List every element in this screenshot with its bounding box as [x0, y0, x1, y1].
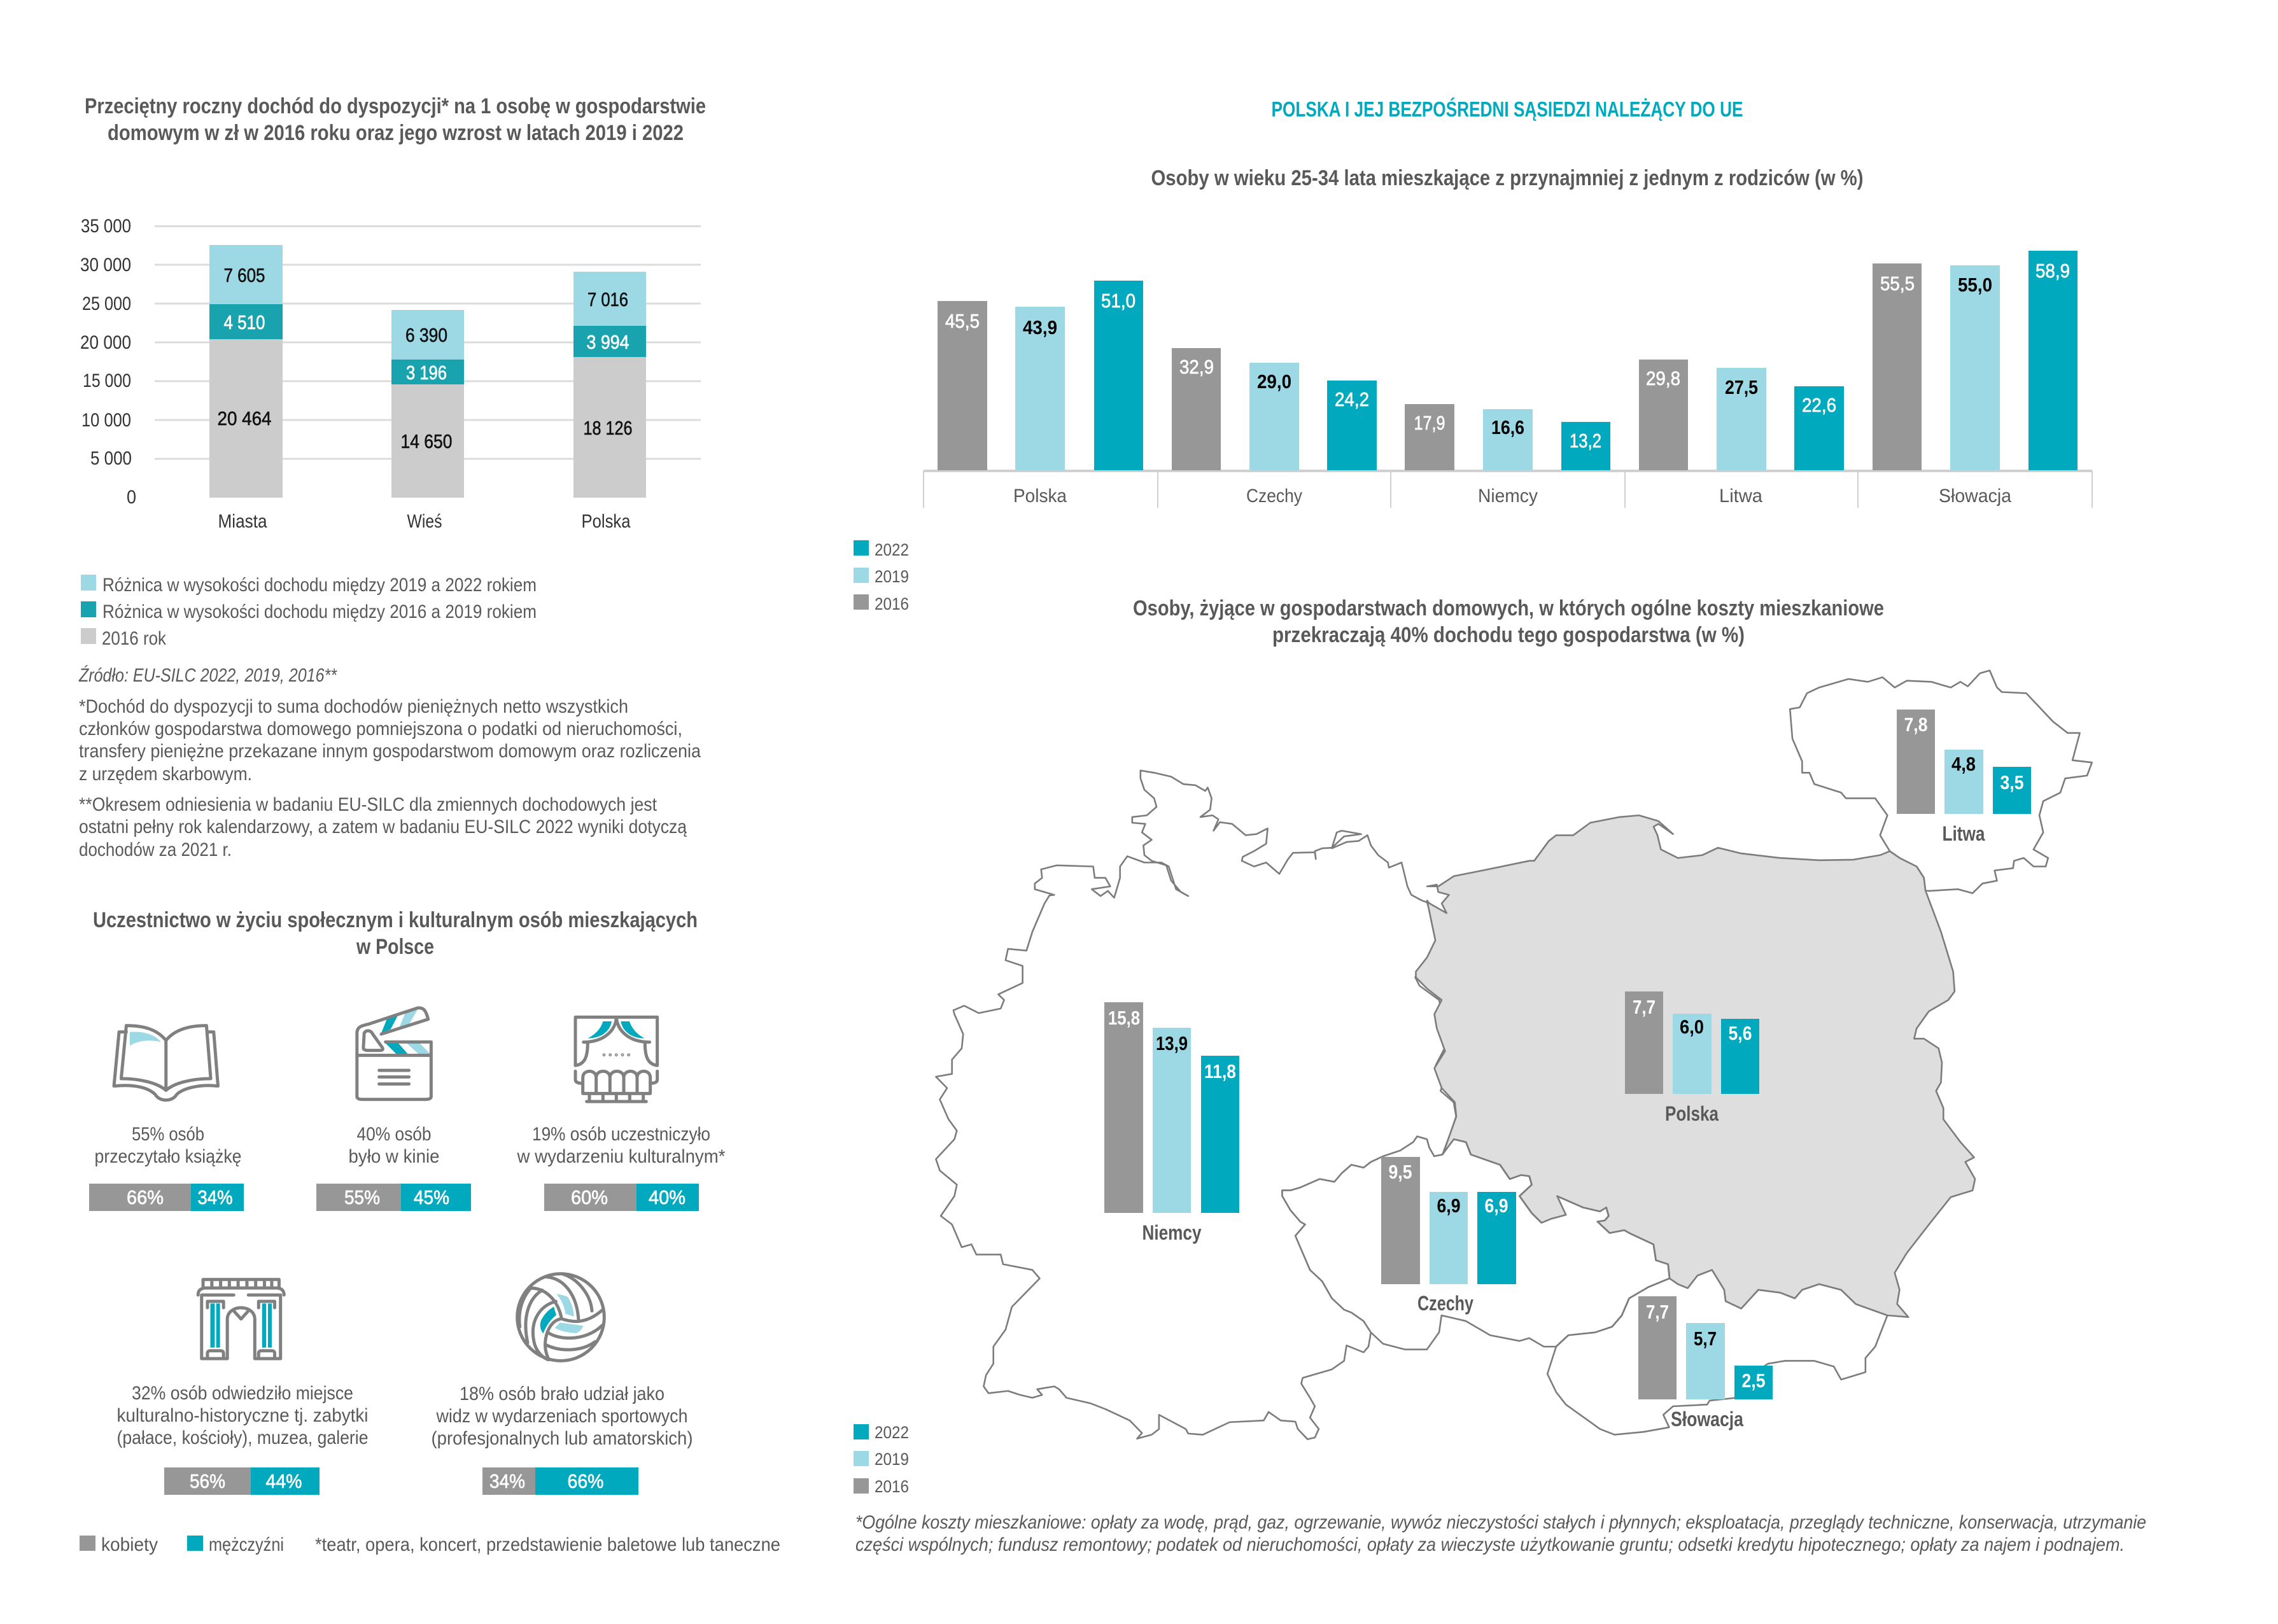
- gender bar: heritage sites: [164, 1467, 320, 1495]
- map: Slovakia: [1547, 1270, 1887, 1435]
- text block: source and notes: ostatni pełny rok kalendarzowy, a zatem w badaniu EU-SILC 2022 wyniki dotyczą: [79, 816, 687, 837]
- map bars: Niemcy: 11,8: [1204, 1060, 1236, 1082]
- legend: gender and footnote: kobiety: [101, 1534, 158, 1555]
- bar group: Niemcy: 17,9: [1414, 412, 1445, 434]
- stacked bar: Wieś: 3 196: [406, 361, 447, 384]
- legend: years: [854, 540, 909, 613]
- stacked bar: Polska: 7 016: [587, 288, 628, 311]
- gender bar: sport events: [482, 1467, 638, 1495]
- legend: gender and footnote: *teatr, opera, koncert, przedstawienie baletowe lub taneczne: [315, 1534, 780, 1555]
- panel: people living with parents chart: [854, 166, 2092, 613]
- map bars: Niemcy: [1104, 1002, 1239, 1244]
- bar group: Litwa: 22,6: [1802, 394, 1836, 416]
- map bars: Niemcy: 15,8: [1108, 1007, 1140, 1029]
- legend: years: 2016: [875, 594, 909, 613]
- panel: social and cultural participation: [80, 908, 780, 1555]
- panel: housing costs map: [854, 596, 2146, 1555]
- bar group: Polska: 45,5: [945, 310, 980, 332]
- text block: source and notes: członków gospodarstwa domowego pomniejszona o podatki od nieruchomości,: [79, 718, 682, 739]
- stacked bar: Miasta: Miasta: [218, 511, 267, 532]
- map bars: Niemcy: 13,9: [1156, 1032, 1188, 1054]
- map: country outlines: [936, 671, 2092, 1439]
- heading: participation title: [93, 908, 698, 959]
- item: heritage sites: [117, 1280, 368, 1495]
- caption: cinema: 40% osób: [356, 1124, 432, 1145]
- legend: income chart: Różnica w wysokości dochodu między 2019 a 2022 rokiem: [102, 575, 537, 596]
- caption: cultural event: 19% osób uczestniczyło: [532, 1124, 710, 1145]
- stacked bar: Polska: 3 994: [587, 331, 629, 353]
- map bars: Słowacja: 5,7: [1694, 1327, 1717, 1350]
- bar group: Czechy: 32,9: [1179, 356, 1214, 378]
- map: Poland: [1416, 815, 1975, 1317]
- map bars: Słowacja: [1638, 1296, 1773, 1431]
- gender bar: book: 34%: [197, 1186, 233, 1208]
- item: sport events: (profesjonalnych lub amatorskich): [432, 1428, 693, 1449]
- map bars: Czechy: [1381, 1157, 1516, 1315]
- footnote: housing costs definition: części wspólnych; fundusz remontowy; podatek od nieruchomości, opłaty za wieczyste użytkowanie gruntu; odsetki kredytu hipotecznego; opłaty za najem i podnajem.: [855, 1534, 2125, 1555]
- map bars: Litwa: 7,8: [1904, 713, 1927, 736]
- item: cultural event: [517, 1017, 726, 1211]
- map bars: Niemcy: Niemcy: [1142, 1221, 1202, 1244]
- caption: heritage sites: 32% osób odwiedziło miejsce: [132, 1383, 353, 1404]
- bar group: Niemcy: 16,6: [1491, 416, 1524, 438]
- stacked bar: Miasta: 7 605: [224, 264, 265, 286]
- y axis labels: 20 000: [80, 332, 131, 353]
- y axis labels: 25 000: [82, 293, 131, 314]
- gender bar: cinema: [316, 1184, 471, 1211]
- icon: triumphal arch: [198, 1280, 284, 1359]
- bar group: Polska: 51,0: [1101, 290, 1135, 312]
- legend: gender and footnote: [80, 1534, 780, 1555]
- stacked bar: Polska: 18 126: [583, 417, 633, 439]
- legend: gender and footnote: mężczyźni: [209, 1534, 284, 1555]
- panel: income chart: [78, 94, 706, 860]
- bar group: Czechy: 29,0: [1257, 370, 1291, 393]
- heading: map title: Osoby, żyjące w gospodarstwach domowych, w których ogólne koszty mieszkaniowe: [1133, 596, 1884, 620]
- map bars: Litwa: [1897, 710, 2031, 845]
- axis frame: [924, 471, 2092, 508]
- map bars: Litwa: 3,5: [2000, 771, 2024, 794]
- bar group: Czechy: [1172, 348, 1377, 507]
- bar group: Czechy: Czechy: [1246, 486, 1302, 507]
- item: sport events: widz w wydarzeniach sportowych: [436, 1406, 687, 1427]
- gender bar: cultural event: 60%: [571, 1186, 608, 1208]
- bar group: Polska: 43,9: [1023, 316, 1057, 339]
- heading: map title: przekraczają 40% dochodu tego gospodarstwa (w %): [1272, 623, 1745, 647]
- map: Czech Republic: [1283, 1137, 1670, 1350]
- y axis labels: [80, 216, 136, 508]
- bar group: Litwa: Litwa: [1719, 486, 1762, 507]
- legend: income chart: Różnica w wysokości dochodu między 2016 a 2019 rokiem: [102, 601, 537, 622]
- gender bar: heritage sites: 44%: [266, 1470, 302, 1492]
- item: sport events: [432, 1274, 693, 1495]
- legend: map years: [854, 1423, 909, 1496]
- text block: source and notes: dochodów za 2021 r.: [79, 839, 232, 860]
- map bars: Czechy: 9,5: [1389, 1161, 1412, 1183]
- map bars: Polska: 5,6: [1729, 1022, 1752, 1044]
- text block: source and notes: **Okresem odniesienia w badaniu EU-SILC dla zmiennych dochodowych jest: [79, 794, 657, 815]
- map bars: Czechy: 6,9: [1437, 1194, 1460, 1217]
- text block: source and notes: *Dochód do dyspozycji to suma dochodów pieniężnych netto wszystkich: [79, 696, 628, 717]
- map bars: Czechy: 6,9: [1484, 1194, 1508, 1217]
- heading: map title: [1133, 596, 1884, 647]
- icon: volleyball: [517, 1274, 604, 1361]
- map bars: Polska: 7,7: [1633, 996, 1656, 1018]
- bar group: Czechy: 24,2: [1335, 388, 1369, 410]
- gender bar: cinema: 55%: [344, 1186, 380, 1208]
- gender bar: heritage sites: 56%: [190, 1470, 225, 1492]
- map bars: Polska: 6,0: [1680, 1016, 1704, 1038]
- text block: source and notes: Źródło: EU-SILC 2022, 2019, 2016**: [78, 665, 337, 686]
- map bars: Czechy: Czechy: [1417, 1292, 1473, 1315]
- bar group: Słowacja: 58,9: [2035, 260, 2070, 282]
- item: book: [89, 1026, 244, 1211]
- y axis labels: 30 000: [80, 255, 131, 276]
- stacked bar chart: income: [80, 216, 701, 532]
- map bars: Słowacja: 2,5: [1741, 1369, 1766, 1392]
- bar group: Słowacja: 55,0: [1958, 274, 1992, 296]
- bar group: Słowacja: Słowacja: [1939, 486, 2011, 507]
- stacked bar: Miasta: 20 464: [218, 407, 271, 430]
- bar group: Polska: Polska: [1013, 486, 1067, 507]
- heading: income chart title: [85, 94, 706, 145]
- map bars: Polska: Polska: [1665, 1102, 1719, 1125]
- legend: map years: 2019: [875, 1450, 909, 1469]
- bar group: Słowacja: [1873, 251, 2078, 507]
- heading: section title: POLSKA I JEJ BEZPOŚREDNI SĄSIEDZI NALEŻĄCY DO UE: [1272, 97, 1743, 121]
- stacked bar: Polska: Polska: [582, 511, 631, 532]
- caption: sport events: 18% osób brało udział jako: [460, 1383, 664, 1404]
- bar group: Polska: [938, 281, 1143, 507]
- legend: map years: 2022: [875, 1423, 909, 1442]
- bar group: Niemcy: Niemcy: [1478, 486, 1538, 507]
- bar group: Słowacja: 55,5: [1880, 272, 1915, 295]
- gender bar: book: 66%: [127, 1186, 164, 1208]
- legend: years: 2019: [875, 567, 909, 586]
- footnote: housing costs definition: *Ogólne koszty mieszkaniowe: opłaty za wodę, prąd, gaz, ogrzewanie, wywóz nieczystości stałych i płynnych; eksploatacja, przeglądy techniczne, konserwacja, utrzymanie: [855, 1512, 2146, 1533]
- y axis labels: 10 000: [81, 410, 131, 431]
- heading: income chart title: domowym w zł w 2016 roku oraz jego wzrost w latach 2019 i 2022: [108, 121, 684, 145]
- legend: map years: 2016: [875, 1477, 909, 1496]
- y axis labels: 35 000: [81, 216, 131, 237]
- legend: income chart: [81, 575, 537, 649]
- legend: income chart: 2016 rok: [102, 628, 167, 649]
- gender bar: cultural event: 40%: [649, 1186, 686, 1208]
- stacked bar: Wieś: 14 650: [401, 430, 452, 452]
- stacked bar: Polska: [573, 272, 646, 532]
- stacked bar: Wieś: [391, 310, 464, 532]
- footnote: housing costs definition: [855, 1512, 2146, 1555]
- gender bar: sport events: 34%: [489, 1470, 525, 1492]
- bar group: Litwa: 27,5: [1725, 376, 1758, 398]
- item: book: przeczytało książkę: [94, 1146, 242, 1167]
- y axis labels: 0: [127, 487, 136, 508]
- stacked bar: Wieś: 6 390: [405, 324, 447, 346]
- gender bar: cinema: 45%: [414, 1186, 449, 1208]
- stacked bar: Wieś: Wieś: [407, 511, 442, 532]
- icon: theatre stage: [575, 1017, 657, 1102]
- text block: source and notes: transfery pieniężne przekazane innym gospodarstwom domowym oraz rozliczenia: [79, 741, 701, 762]
- heading: chart title: Osoby w wieku 25-34 lata mieszkające z przynajmniej z jednym z rodziców (w %): [1151, 166, 1864, 190]
- map bars: Litwa: 4,8: [1951, 753, 1976, 775]
- heading: participation title: Uczestnictwo w życiu społecznym i kulturalnym osób mieszkających: [93, 908, 698, 932]
- y axis labels: 5 000: [90, 448, 132, 469]
- legend: years: 2022: [875, 540, 909, 559]
- bar group: Niemcy: 13,2: [1570, 430, 1601, 452]
- caption: book: 55% osób: [132, 1124, 204, 1145]
- map: Lithuania: [1790, 671, 2092, 893]
- gender bar: book: [89, 1184, 244, 1211]
- icon: book: [114, 1026, 218, 1100]
- item: heritage sites: (pałace, kościoły), muzea, galerie: [117, 1427, 368, 1448]
- text block: source and notes: [78, 665, 701, 860]
- text block: source and notes: z urzędem skarbowym.: [79, 764, 252, 785]
- map bars: Słowacja: 7,7: [1646, 1301, 1669, 1323]
- gender bar: sport events: 66%: [568, 1470, 603, 1492]
- map bars: Polska: [1625, 991, 1759, 1125]
- bar group: Niemcy: [1405, 404, 1610, 507]
- bar group: Litwa: [1639, 360, 1844, 507]
- stacked bar: Miasta: [209, 245, 283, 532]
- heading: income chart title: Przeciętny roczny dochód do dyspozycji* na 1 osobę w gospodarstwie: [85, 94, 706, 118]
- gender bar: cultural event: [544, 1184, 699, 1211]
- item: heritage sites: kulturalno-historyczne tj. zabytki: [117, 1405, 368, 1426]
- map bars: Słowacja: Słowacja: [1671, 1408, 1743, 1431]
- stacked bar: Miasta: 4 510: [224, 311, 265, 333]
- item: cinema: [316, 1008, 471, 1211]
- heading: participation title: w Polsce: [356, 935, 434, 959]
- y axis labels: 15 000: [83, 370, 131, 391]
- map: Germany: [936, 771, 1456, 1439]
- map bars: Litwa: Litwa: [1943, 822, 1985, 845]
- bar group: Litwa: 29,8: [1646, 367, 1680, 389]
- icon: clapperboard: [357, 1008, 431, 1100]
- item: cinema: było w kinie: [349, 1146, 439, 1167]
- item: cultural event: w wydarzeniu kulturalnym*: [517, 1146, 726, 1167]
